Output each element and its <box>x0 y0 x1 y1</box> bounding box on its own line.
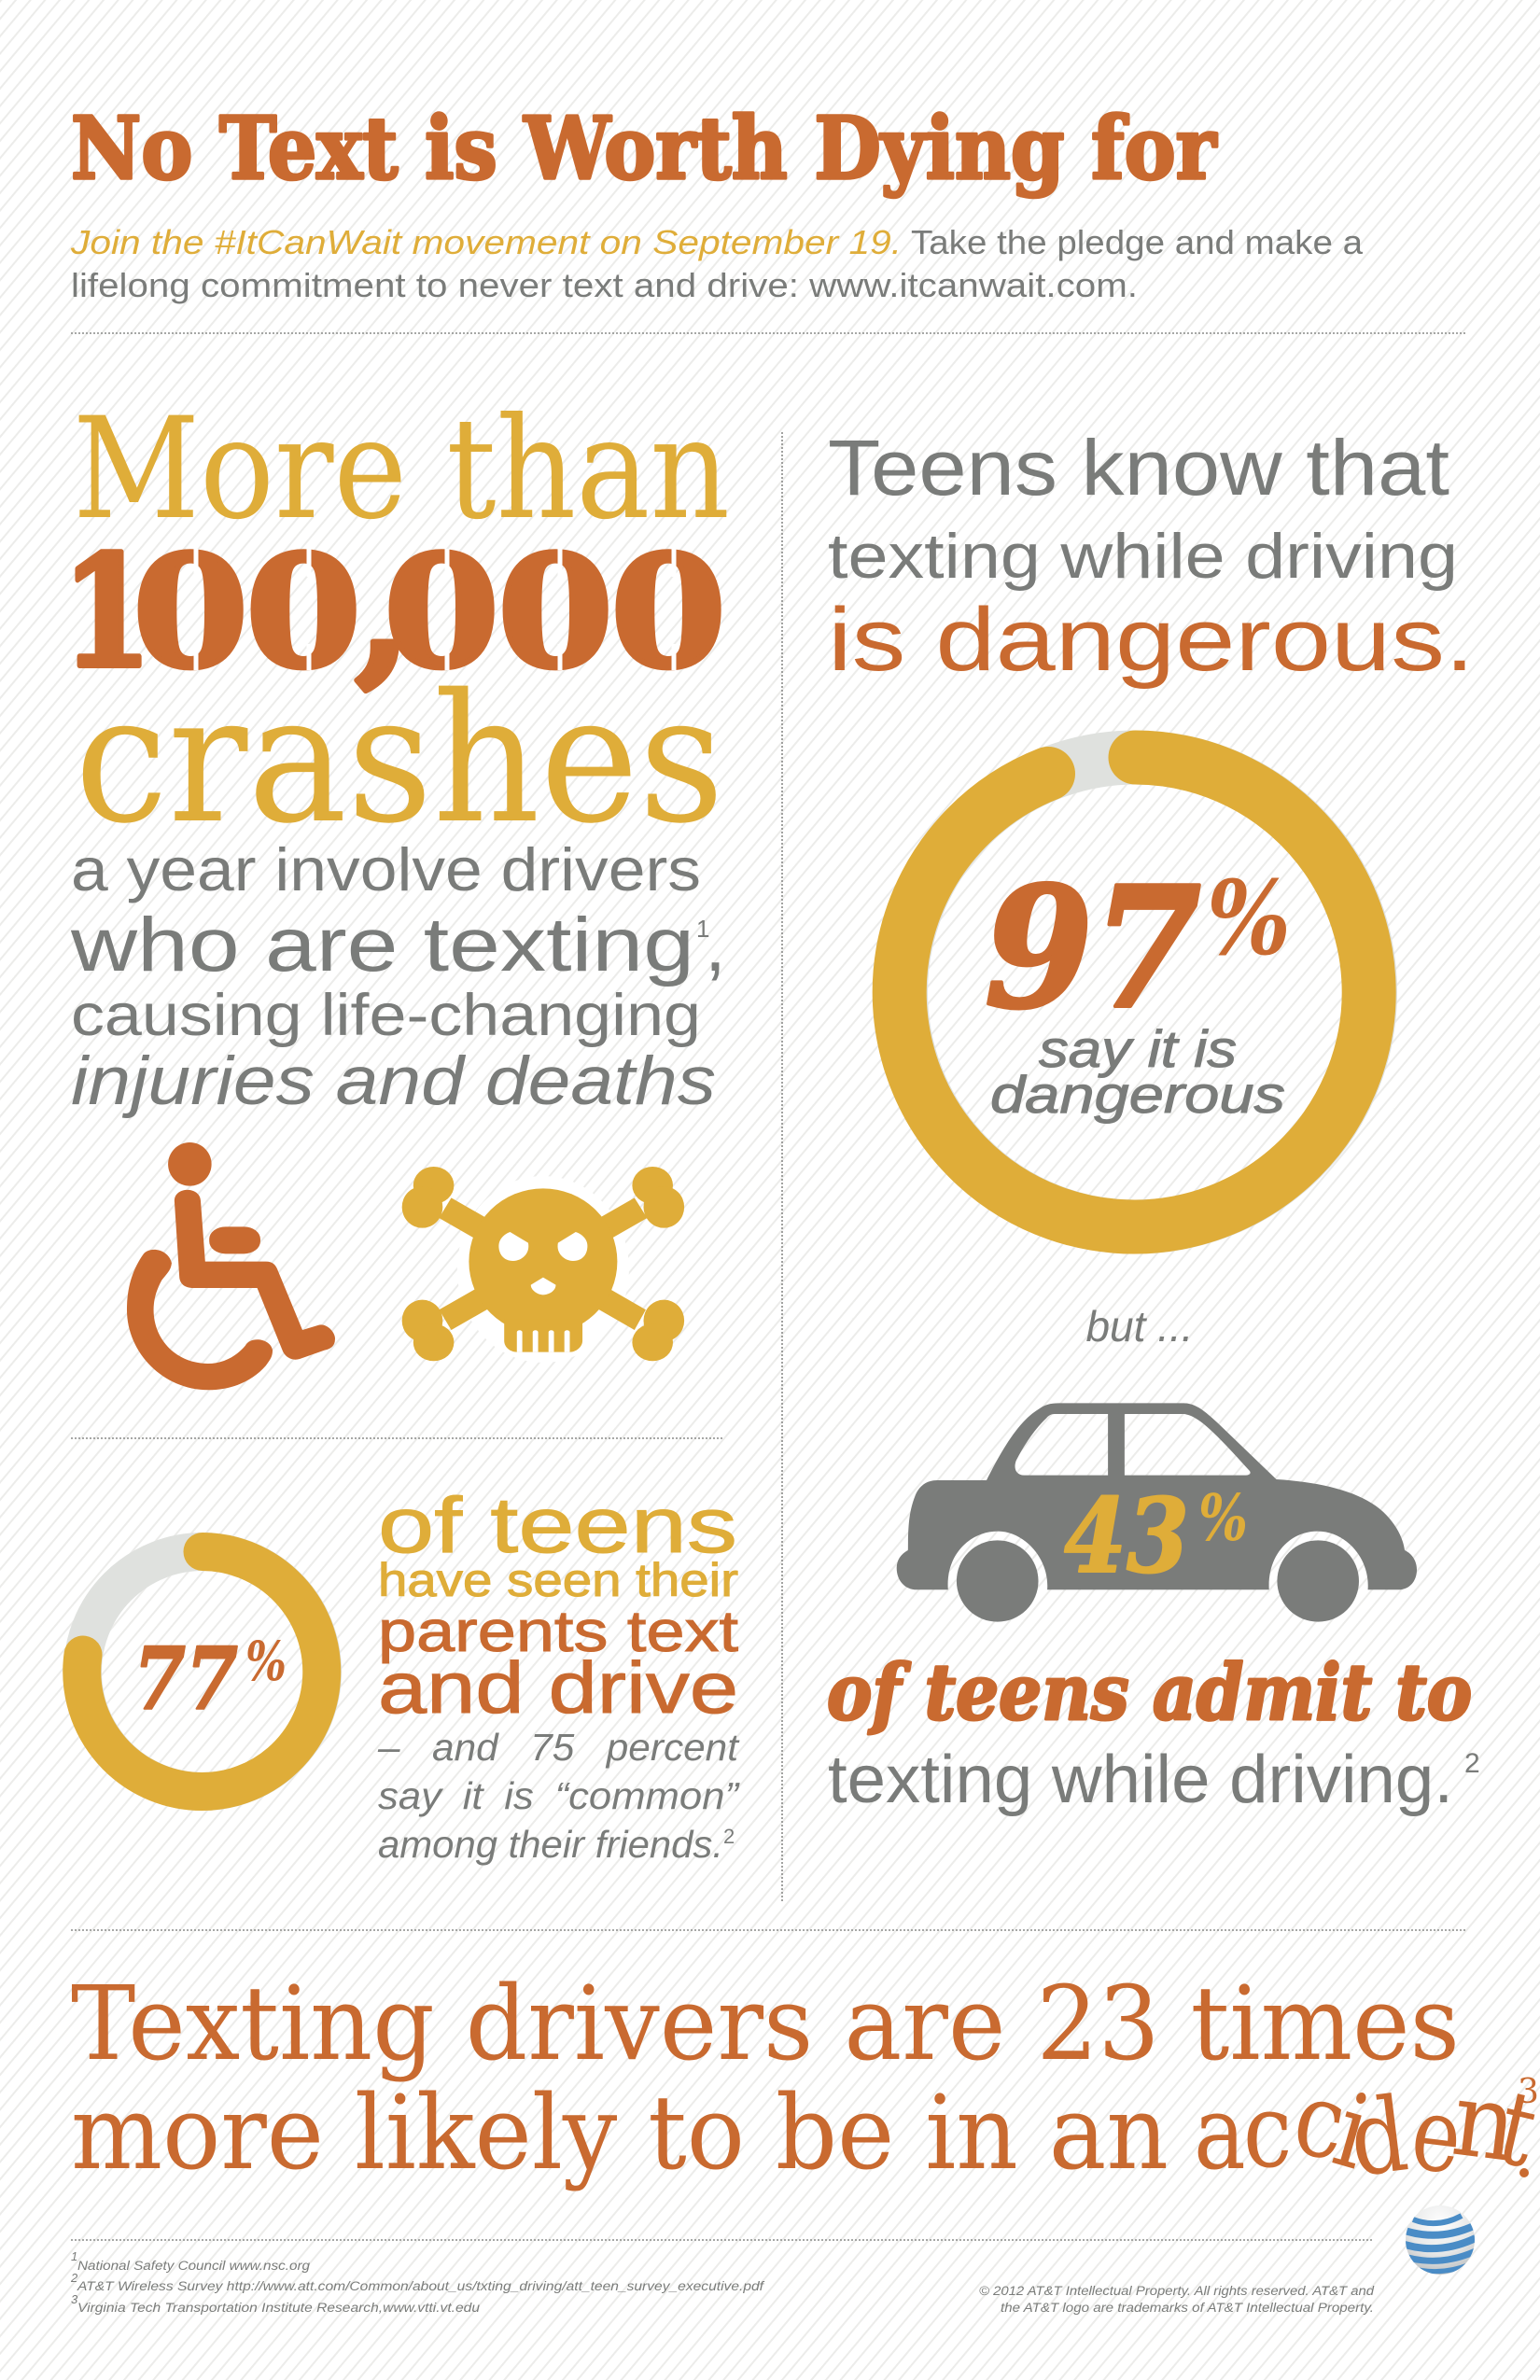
causing life-changing: causing life-changing <box>71 983 701 1048</box>
texting while driving: texting while driving. <box>828 1743 1453 1817</box>
footnote marker: 2 <box>1464 1748 1480 1779</box>
footnote marker: 2 <box>723 1825 735 1848</box>
panel: 97 percent donut <box>900 758 1370 1226</box>
comma: , <box>705 903 726 987</box>
footnotes <box>70 2249 764 2315</box>
donut value arc <box>900 758 1369 1226</box>
texting while driving: texting while driving <box>828 521 1458 592</box>
and drive: and drive <box>378 1646 738 1729</box>
scattered word: accident: c <box>1285 2058 1354 2185</box>
intro text <box>70 223 1364 304</box>
copyright: © 2012 AT&T Intellectual Property. All rights reserved. AT&T and <box>979 2284 1375 2298</box>
dangerous: dangerous <box>990 1065 1285 1124</box>
scattered word: accident: i <box>1323 2071 1382 2193</box>
scattered word: accident: d <box>1344 2075 1414 2201</box>
scattered word: accident <box>1194 2058 1540 2201</box>
a year involve drivers: a year involve drivers <box>71 835 701 903</box>
percent sign: % <box>1198 1481 1248 1556</box>
panel: teens see parents text <box>377 1481 740 1866</box>
headline line two: more likely to be in an <box>71 2073 1169 2192</box>
injuries and deaths: injuries and deaths <box>71 1043 716 1119</box>
icon: car with 43 percent <box>897 1403 1417 1622</box>
scattered word: accident: c <box>1243 2072 1292 2191</box>
100,000: 1 <box>62 522 152 702</box>
footnote marker: 1 <box>696 915 709 943</box>
97: 97 <box>985 850 1201 1045</box>
footnotes: 3 <box>71 2292 78 2306</box>
77: 77 <box>133 1629 238 1729</box>
donut track <box>82 1551 323 1792</box>
donut track <box>901 758 1370 1226</box>
of teens: of teens <box>378 1481 737 1569</box>
copyright <box>979 2284 1375 2315</box>
say it is: say it is <box>1039 1019 1237 1078</box>
icon: wheelchair <box>127 1142 335 1390</box>
scattered word: accident: e <box>1406 2074 1468 2198</box>
of teens admit to: of teens admit to <box>827 1648 1472 1738</box>
pledge line two: lifelong commitment to never text and drive: www.itcanwait.com. <box>71 266 1138 304</box>
icon: skull and crossbones <box>402 1167 684 1363</box>
crashes: crashes <box>75 656 724 862</box>
scattered word: accident: a <box>1194 2074 1246 2193</box>
copyright: the AT&T logo are trademarks of AT&T Intellectual Property. <box>1001 2301 1374 2315</box>
footnotes: National Safety Council www.nsc.org <box>77 2259 311 2273</box>
footnotes: 2 <box>70 2271 78 2285</box>
but ...: but ... <box>1085 1302 1194 1351</box>
75 percent line: – and 75 percent <box>377 1726 740 1769</box>
pledge line one: Take the pledge and make a <box>911 223 1364 261</box>
who are texting: who are texting <box>70 903 694 987</box>
is dangerous: is dangerous. <box>828 590 1475 690</box>
car silhouette <box>897 1403 1417 1622</box>
panel: teens know heading <box>828 424 1475 690</box>
title: No Text is Worth Dying for <box>71 98 1217 199</box>
common line: say it is “common” <box>378 1774 740 1817</box>
100,000: 00,000 <box>133 523 726 702</box>
friends line: among their friends. <box>378 1823 723 1866</box>
donut value arc <box>82 1551 322 1791</box>
panel: crashes statistic <box>62 388 730 1119</box>
teens know that: Teens know that <box>828 424 1449 511</box>
scattered word: accident: n <box>1447 2059 1523 2186</box>
percent sign: % <box>245 1630 287 1693</box>
footnotes: 1 <box>71 2249 77 2263</box>
footnotes: Virginia Tech Transportation Institute Research,www.vtti.vt.edu <box>77 2301 481 2315</box>
panel: 23 times headline <box>71 1964 1540 2201</box>
call to action: Join the #ItCanWait movement on September 19. <box>70 223 902 261</box>
footnotes: AT&T Wireless Survey http://www.att.com/Common/about_us/txting_driving/att_teen_survey_executive.pdf <box>77 2279 764 2293</box>
more than: More than <box>73 388 730 551</box>
have seen their: have seen their <box>378 1554 738 1606</box>
panel: 77 percent donut <box>82 1551 323 1792</box>
scattered word: accident: 3 <box>1518 2073 1539 2111</box>
43: 43 <box>1064 1476 1189 1596</box>
headline line one: Texting drivers are 23 times <box>71 1964 1460 2083</box>
parents text: parents text <box>378 1600 738 1664</box>
percent sign: % <box>1207 858 1291 978</box>
icon: AT&T globe <box>1405 2205 1476 2275</box>
